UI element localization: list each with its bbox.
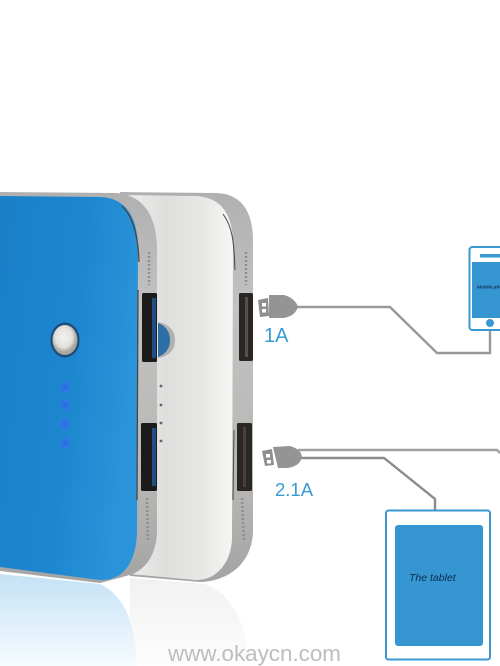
icon: mobile phone (470, 247, 500, 330)
white power bank (120, 192, 253, 582)
tablet label: The tablet (409, 572, 457, 584)
blue power bank (0, 192, 157, 583)
phone screen (472, 262, 500, 318)
label: 2.1A: 2.1A (275, 479, 314, 500)
white face (120, 195, 233, 580)
watermark: www.okaycn.com (167, 641, 341, 666)
engraved marks on white frame (242, 252, 246, 542)
phone home button (486, 319, 494, 327)
port: white bank upper USB (239, 293, 253, 361)
metal frame of blue bank (0, 192, 157, 583)
metal frame of white bank (120, 192, 253, 582)
cable: 1A to phone (258, 295, 490, 353)
phone speaker (480, 254, 500, 258)
blue face (0, 196, 138, 580)
dark inner edge of frame (122, 206, 139, 500)
reflection under the power banks (0, 574, 250, 666)
port: blue bank lower USB (141, 423, 157, 491)
cable: 2.1A to tablet and beyond (262, 446, 500, 510)
button: white bank (158, 322, 175, 358)
engraved marks on blue frame (147, 252, 149, 542)
port: white bank lower USB (237, 423, 252, 491)
tablet screen (395, 525, 483, 646)
label: 1A: 1A (264, 325, 289, 347)
dark inner edge of frame (223, 214, 235, 500)
power button (50, 322, 80, 358)
LED indicators (57, 379, 73, 451)
icon: tablet (386, 510, 490, 660)
USB plug: 1A (258, 295, 298, 318)
indicator dots: white bank (160, 385, 162, 442)
USB plug: 2.1A (262, 446, 302, 468)
port: blue bank upper USB (142, 293, 157, 362)
